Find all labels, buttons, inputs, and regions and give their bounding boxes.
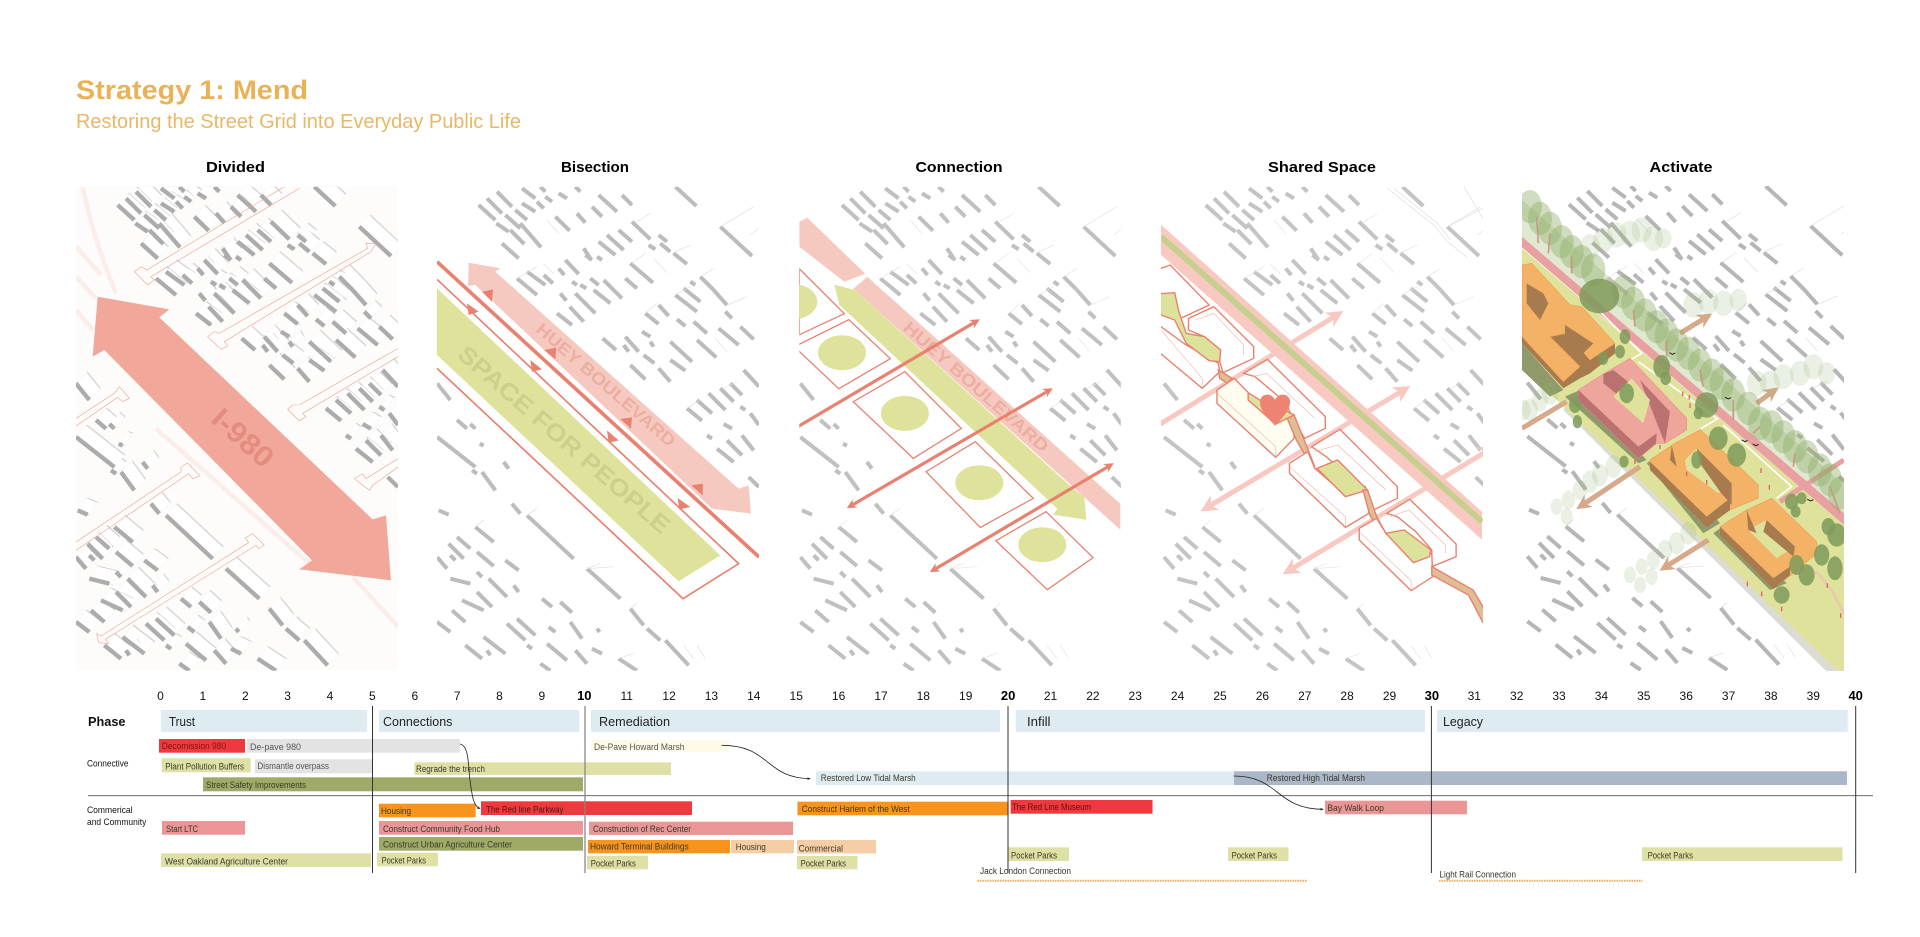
- block 1: [1156, 265, 1254, 388]
- phase: Legacy: [1437, 710, 1848, 732]
- year axis: 7: [454, 689, 461, 703]
- bar: Start LTC: Start LTC: [166, 824, 198, 834]
- bar: De-Pave Howard Marsh: [591, 740, 729, 752]
- bar: Decomission 980: Decomission 980: [162, 741, 226, 751]
- year axis: 26: [1256, 689, 1269, 703]
- year axis: 33: [1552, 689, 1566, 703]
- bar: Howard Terminal Buildings: [588, 840, 730, 853]
- arrow: Huey Boulevard: [468, 263, 751, 514]
- bar: Pocket Parks 5: [1228, 847, 1288, 861]
- bar: Construct Urban Agriculture Center: Construct Urban Agriculture Center: [383, 839, 512, 849]
- bar: Pocket Parks 6: Pocket Parks: [1648, 850, 1693, 860]
- space outline: [437, 279, 739, 599]
- label: Light Rail Connection: Light Rail Connection: [1440, 870, 1516, 880]
- pale roadway: [1161, 225, 1482, 540]
- phase: Trust: Trust: [169, 715, 195, 729]
- pale roadway: [799, 218, 1120, 530]
- roof edge lines: [1161, 313, 1446, 590]
- boulevard lines: [437, 262, 759, 557]
- cross paths: [1522, 316, 1844, 568]
- bar: Pocket Parks 4: [1007, 847, 1069, 861]
- panel: Activate map: [1522, 186, 1844, 671]
- milestone lines: [372, 706, 1856, 873]
- bar: Pocket Parks 2: Pocket Parks: [591, 859, 636, 869]
- bar: Commercial: Commercial: [799, 844, 843, 854]
- bar: Housing: Housing: [381, 806, 411, 816]
- year axis: 39: [1807, 689, 1820, 703]
- year axis: 3: [284, 689, 291, 703]
- bar: Construct Community Food Hub: Construct Community Food Hub: [383, 824, 500, 834]
- year axis: 2: [242, 689, 249, 703]
- panel: Connection map: [799, 186, 1121, 671]
- pale connection arrows: [1151, 314, 1491, 572]
- year axis: 40: [1848, 688, 1863, 703]
- year axis: 14: [747, 689, 761, 703]
- year axis: 6: [411, 689, 418, 703]
- white paths: [1600, 312, 1792, 498]
- year axis: 34: [1595, 689, 1608, 703]
- orange block 3: [1650, 429, 1758, 527]
- label: Jack London Connection: Jack London Connection: [980, 866, 1071, 876]
- panel: Bisection map: [437, 186, 759, 671]
- dark trees: [1569, 279, 1846, 604]
- alley outlines: [76, 187, 398, 644]
- year axis: 21: [1044, 689, 1057, 703]
- year axis: 15: [790, 689, 803, 703]
- bar: The Red line Parkway: The Red line Parkway: [486, 804, 564, 814]
- phase: Trust: [161, 710, 367, 732]
- building roof edges: [475, 207, 759, 659]
- bar: Construction of Rec Center: [589, 822, 793, 835]
- bar: Restored Low Tidal Marsh: [816, 771, 1234, 785]
- building shadows: [1164, 187, 1486, 671]
- faint former roadway bands: [76, 187, 398, 627]
- row label: Commercial and Community: Commerical: [87, 805, 132, 816]
- curved lawn path: [1815, 572, 1844, 613]
- year axis: 38: [1764, 689, 1778, 703]
- label: I-980: I-980: [205, 402, 280, 474]
- year axis: 12: [662, 689, 676, 703]
- pink block 2: [1578, 358, 1687, 458]
- bar: Plant Pollution Buffers: Plant Pollution Buffers: [165, 762, 244, 772]
- divider: [88, 795, 1873, 797]
- subtitle: Restoring the Street Grid into Everyday Public Life: [76, 111, 521, 133]
- dotted route: Light Rail: [1439, 880, 1642, 882]
- year axis: 32: [1510, 689, 1524, 703]
- year axis: 27: [1298, 689, 1312, 703]
- building shadows: [437, 187, 759, 671]
- heading: Activate: Activate: [1650, 159, 1712, 176]
- green space band: [437, 288, 720, 581]
- building shadows: [800, 187, 1122, 671]
- panel: Shared Space map: [1161, 186, 1483, 671]
- building blocks: [76, 175, 409, 671]
- bar: The Red Line Museum: The Red Line Museum: [1012, 802, 1091, 812]
- year axis: 19: [959, 689, 973, 703]
- heading: Divided: Divided: [206, 159, 265, 176]
- year axis: 29: [1383, 689, 1396, 703]
- building shadows: [1527, 186, 1849, 670]
- year axis: 30: [1425, 688, 1439, 703]
- bar: Regrade the trench: Regrade the trench: [416, 764, 485, 774]
- year axis: 35: [1637, 689, 1651, 703]
- year axis: 24: [1171, 689, 1185, 703]
- panel background: [76, 187, 398, 671]
- bar: Restored High Tidal Marsh: Restored High Tidal Marsh: [1267, 773, 1365, 783]
- lawn: [1522, 248, 1844, 673]
- bar: Commercial: [797, 840, 876, 854]
- green median: [1161, 237, 1482, 522]
- bar: Decomission 980: [159, 739, 245, 753]
- year axis: 23: [1129, 689, 1142, 703]
- year axis: 28: [1340, 689, 1354, 703]
- bar: Construct Harlem of the West: Construct Harlem of the West: [802, 804, 910, 814]
- bar: Housing: [379, 804, 476, 817]
- bar: The Red line Parkway: [481, 801, 692, 815]
- bar: Pocket Parks 1: [377, 853, 438, 866]
- year axis: 18: [917, 689, 930, 703]
- year axis: 37: [1722, 689, 1736, 703]
- tree band ground tint: [1522, 200, 1844, 513]
- bar: Start LTC: [162, 821, 245, 835]
- direction triangles: [467, 289, 703, 509]
- bar: De-pave 980: De-pave 980: [250, 742, 301, 752]
- bar: Pocket Parks 3: Pocket Parks: [801, 859, 846, 869]
- bar: Pocket Parks 1: Pocket Parks: [382, 856, 426, 866]
- heading: Bisection: Bisection: [561, 159, 629, 176]
- bar: De-Pave Howard Marsh: De-Pave Howard Marsh: [594, 742, 684, 752]
- row label: Commercial and Community: and Community: [87, 817, 147, 828]
- phase: Infill: [1016, 710, 1425, 732]
- year axis: 0: [157, 689, 164, 703]
- phase: Remediation: [591, 710, 1000, 732]
- label: Space for People: SPACE FOR PEOPLE: [452, 341, 675, 539]
- tree trunks: [1537, 217, 1840, 513]
- year axis: 16: [832, 689, 846, 703]
- bar: Construct Harlem of the West: [797, 802, 1009, 815]
- arrow: I-980: [93, 297, 391, 580]
- bar: Pocket Parks 2: [587, 856, 648, 869]
- bar: Pocket Parks 6: [1642, 847, 1842, 861]
- connector curves: [460, 744, 1323, 809]
- phase: Connections: Connections: [383, 715, 452, 729]
- bar: West Oakland Agriculture Center: [161, 853, 371, 867]
- year axis: 8: [496, 689, 503, 703]
- bar: Housing (second): [731, 840, 794, 853]
- orange block 1: [1522, 263, 1615, 388]
- year axis: 13: [705, 689, 718, 703]
- bar: Housing (second): Housing: [736, 842, 766, 852]
- bar: Bay Walk Loop: [1325, 801, 1467, 814]
- bar: The Red Line Museum: [1011, 800, 1152, 814]
- bar: Dismantle overpass: [255, 759, 372, 773]
- timeline chart: [87, 688, 1873, 881]
- bar: De-pave 980: [247, 739, 460, 753]
- bar: Street Safety Improvements: [203, 777, 583, 791]
- grey edge strip: [1563, 403, 1844, 673]
- year axis: 20: [1001, 688, 1015, 703]
- year axis: 22: [1086, 689, 1100, 703]
- block 3: [1289, 429, 1397, 535]
- year axis: 9: [539, 689, 546, 703]
- block 2 with heart courtyard: [1217, 359, 1325, 467]
- year axis: 10: [577, 688, 592, 703]
- bar: Plant Pollution Buffers: [162, 758, 251, 772]
- connection arrows: [789, 321, 1111, 571]
- fading trees: [1516, 217, 1835, 593]
- bar: Dismantle overpass: Dismantle overpass: [257, 761, 329, 771]
- bar: Pocket Parks 3: [797, 856, 858, 869]
- bar: Construct Community Food Hub: [379, 821, 583, 835]
- row label: Connective: Connective: [87, 758, 128, 770]
- label: Huey Boulevard: HUEY BOULEVARD: [900, 318, 1052, 456]
- label: Huey Boulevard: HUEY BOULEVARD: [532, 320, 679, 451]
- courtyard blocks: [1156, 265, 1487, 630]
- building shadows on lawn: [1522, 343, 1787, 590]
- panel: Divided map: [76, 186, 398, 671]
- bar: Bay Walk Loop: Bay Walk Loop: [1327, 803, 1384, 813]
- phase: Infill: Infill: [1027, 715, 1050, 729]
- orange block 4: [1720, 498, 1817, 589]
- phase: Legacy: Legacy: [1443, 715, 1484, 729]
- birds: [1669, 353, 1813, 501]
- heading: Shared Space: Shared Space: [1268, 159, 1376, 176]
- phase: Connections: [379, 710, 579, 732]
- year axis: 11: [620, 689, 633, 703]
- blocks with green circles: [769, 269, 1093, 590]
- year axis: 25: [1213, 689, 1227, 703]
- year axis: 1: [200, 689, 207, 703]
- bar: West Oakland Agriculture Center: West Oakland Agriculture Center: [165, 857, 288, 867]
- bar: Construct Urban Agriculture Center: [379, 837, 583, 851]
- dotted route: Jack London: [977, 880, 1307, 882]
- year axis: 4: [327, 689, 334, 703]
- icon: heart: [1260, 395, 1290, 426]
- pink street: [1522, 237, 1844, 525]
- bar: Restored Low Tidal Marsh: Restored Low Tidal Marsh: [821, 773, 916, 783]
- bar: Restored High Tidal Marsh: [1234, 771, 1847, 785]
- bar: Street Safety Improvements: Street Safety Improvements: [206, 780, 306, 790]
- title: Strategy 1: Mend: [76, 75, 308, 105]
- phase: Remediation: Remediation: [599, 715, 670, 729]
- street tree row: [1518, 190, 1852, 510]
- bar: Pocket Parks 4: Pocket Parks: [1011, 850, 1057, 860]
- bar: Regrade the trench: [414, 762, 671, 775]
- year axis: 5: [369, 689, 376, 703]
- year axis: 36: [1680, 689, 1693, 703]
- block 4: [1359, 499, 1487, 630]
- year axis: 17: [874, 689, 888, 703]
- bar: Construction of Rec Center: Construction of Rec Center: [593, 824, 691, 834]
- green arrow: [834, 285, 1086, 520]
- year axis: 31: [1468, 689, 1481, 703]
- bar: Howard Terminal Buildings: Howard Terminal Buildings: [590, 842, 689, 852]
- row label: Phase: Phase: [88, 715, 126, 729]
- bar: Pocket Parks 5: Pocket Parks: [1232, 850, 1277, 860]
- year axis: [157, 688, 1863, 703]
- heading: Connection: Connection: [916, 159, 1002, 176]
- people: [1635, 392, 1841, 618]
